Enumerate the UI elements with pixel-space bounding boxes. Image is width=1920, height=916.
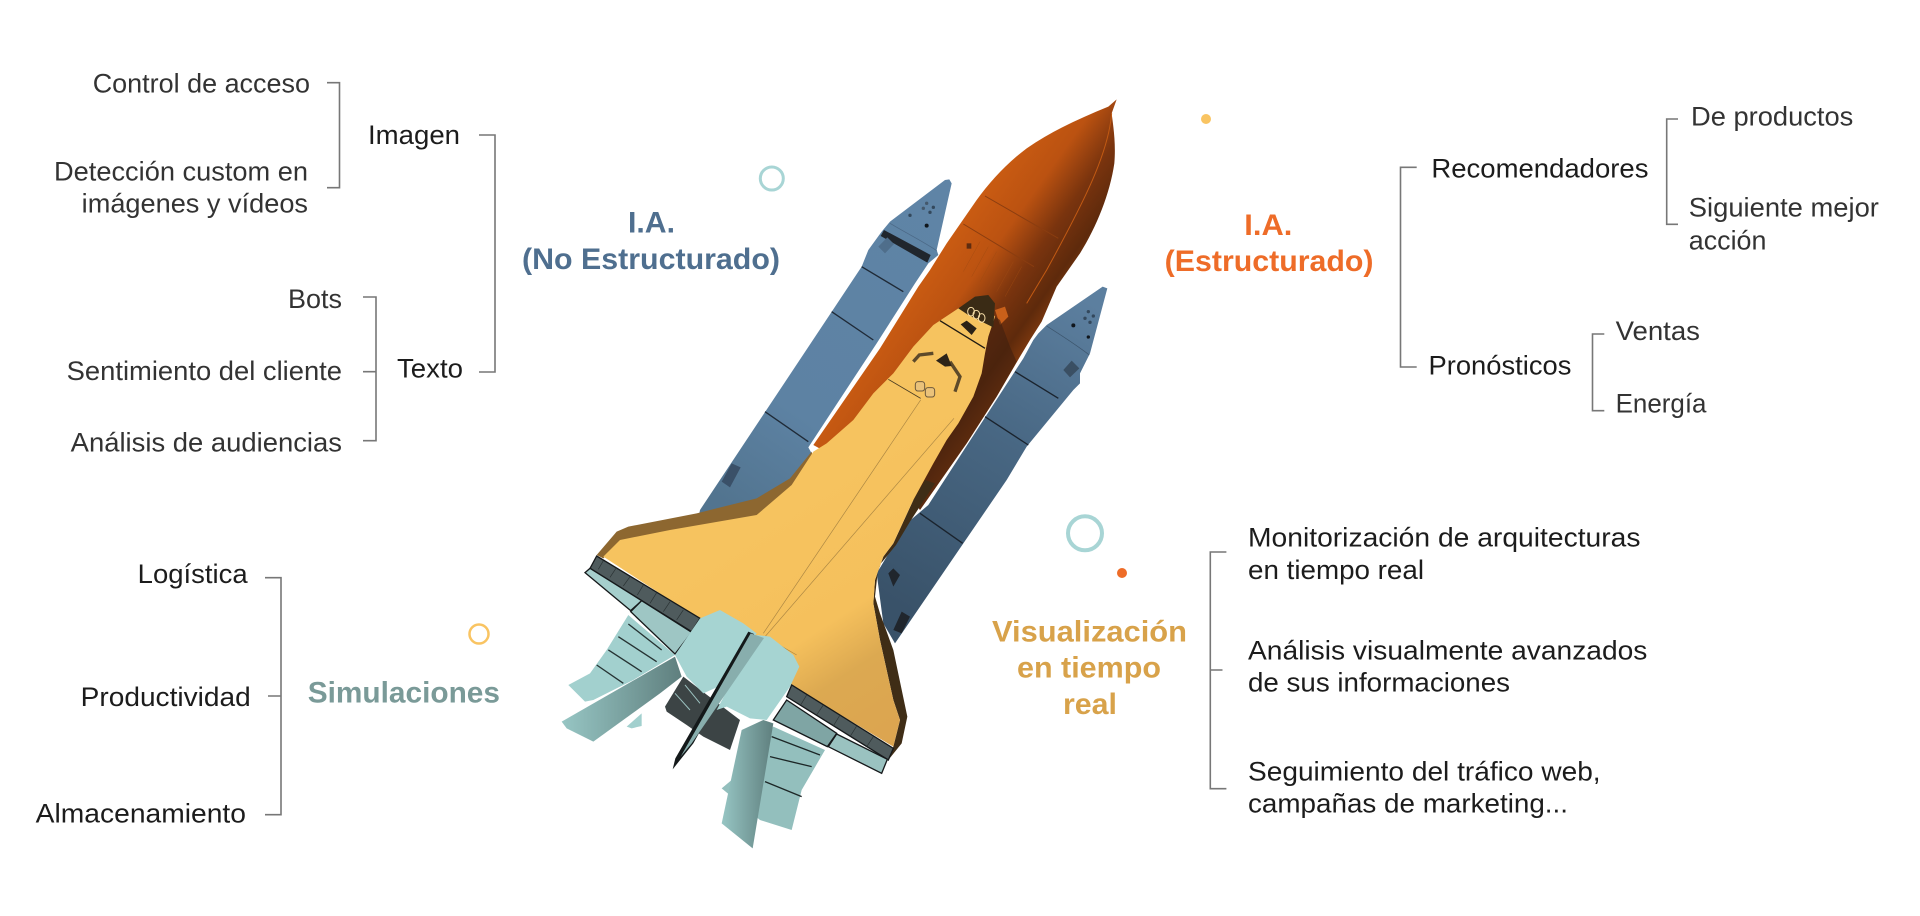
- list: Simulaciones items: [36, 559, 281, 829]
- decorative dot: orange: [1117, 568, 1127, 578]
- decorative ring: yellow: [470, 624, 488, 644]
- list: Pronósticos items: [1592, 316, 1707, 419]
- right wing flaps: [773, 685, 893, 773]
- left wing flaps: [585, 556, 700, 654]
- list: Simulaciones items: Productividad: [81, 682, 251, 712]
- list: Imagen items: Control de acceso: [93, 69, 310, 99]
- list: Recomendadores items: [1667, 101, 1879, 255]
- heading: Visualización en tiempo real: real: [1063, 688, 1117, 721]
- tail pods and stabilizer: [562, 610, 799, 848]
- branch: Recomendadores and Pronósticos: Recomendadores: [1431, 154, 1648, 184]
- list: Recomendadores items: acción: [1689, 225, 1766, 255]
- list: Visualización items: de sus informaciones: [1248, 668, 1510, 698]
- heading: Visualización en tiempo real: en tiempo: [1017, 652, 1161, 685]
- list: Pronósticos items: Energía: [1616, 389, 1707, 419]
- section: Visualización en tiempo real: [992, 523, 1647, 819]
- heading: I.A. (No Estructurado): [522, 207, 780, 276]
- heading: Visualización en tiempo real: Visualización: [992, 616, 1187, 649]
- list: Imagen items: imágenes y vídeos: [82, 189, 308, 219]
- shuttle nose and cockpit: [888, 295, 995, 398]
- list: Visualización items: Seguimiento del tráfico web,: [1248, 757, 1601, 787]
- list: Visualización items: Análisis visualmente avanzados: [1248, 635, 1647, 665]
- list: Imagen items: [54, 69, 340, 219]
- shuttle wing edges: [597, 452, 935, 760]
- section: I.A. estructurado: [1165, 101, 1879, 419]
- section: I.A. no estructurado: [54, 69, 780, 458]
- list: Pronósticos items: Ventas: [1616, 316, 1700, 346]
- list: Visualización items: [1210, 523, 1647, 819]
- list: Simulaciones items: Logística: [138, 559, 249, 589]
- list: Texto items: Análisis de audiencias: [71, 428, 342, 458]
- heading: I.A. (No Estructurado): I.A.: [628, 207, 675, 240]
- branch: Imagen and Texto: Texto: [397, 354, 463, 384]
- list: Recomendadores items: Siguiente mejor: [1689, 193, 1879, 223]
- branch: Recomendadores and Pronósticos: Pronósticos: [1428, 350, 1571, 380]
- engine nozzles: [568, 615, 825, 830]
- list: Simulaciones items: Almacenamiento: [36, 799, 246, 829]
- branch: Imagen and Texto: Imagen: [368, 120, 460, 150]
- heading: Visualización en tiempo real: [992, 616, 1187, 721]
- rocket illustration: [562, 99, 1117, 848]
- list: Texto items: Bots: [288, 284, 342, 314]
- heading: I.A. (Estructurado): [1165, 209, 1374, 278]
- shuttle panel lines: [763, 400, 954, 655]
- list: Texto items: [67, 284, 376, 458]
- heading: Simulaciones: Simulaciones: [308, 677, 500, 710]
- heading: I.A. (Estructurado): (Estructurado): [1165, 245, 1374, 278]
- list: Visualización items: en tiempo real: [1248, 555, 1424, 585]
- section: Simulaciones: [36, 559, 500, 829]
- heading: I.A. (No Estructurado): (No Estructurado): [522, 243, 780, 276]
- decorative ring: teal large: [1068, 516, 1102, 550]
- branch: Recomendadores and Pronósticos: [1400, 154, 1648, 380]
- orange external tank: [813, 99, 1117, 510]
- list: Texto items: Sentimiento del cliente: [67, 356, 342, 386]
- heading: I.A. (Estructurado): I.A.: [1244, 209, 1292, 242]
- shuttle orbiter body: [603, 308, 995, 747]
- branch: Imagen and Texto: [368, 120, 495, 384]
- list: Imagen items: Detección custom en: [54, 157, 308, 187]
- decorative dot: yellow: [1201, 114, 1211, 124]
- left booster: [698, 179, 952, 518]
- shadow between shuttle and tank: [913, 317, 1017, 510]
- list: Recomendadores items: De productos: [1691, 101, 1853, 131]
- list: Visualización items: Monitorización de arquitecturas: [1248, 523, 1640, 553]
- list: Visualización items: campañas de marketing...: [1248, 789, 1568, 819]
- right booster: [877, 287, 1107, 643]
- decorative ring: teal top: [760, 167, 783, 190]
